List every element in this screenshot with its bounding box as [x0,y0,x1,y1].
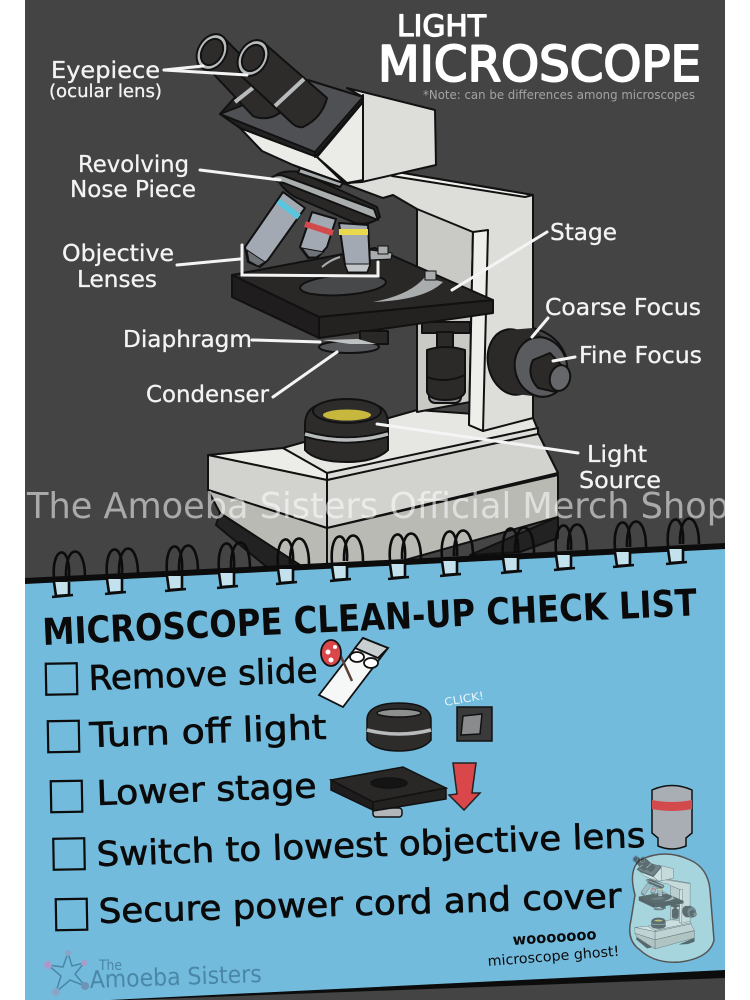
coarse and fine focus knobs [482,325,574,403]
logo: amoeba sisters [44,950,262,996]
arm and column [345,172,533,431]
part labels: Stage [550,220,617,246]
part labels: Fine Focus [579,343,702,369]
icon: light [367,703,431,751]
part labels: Light [587,442,647,468]
microscope base [208,410,558,582]
illustration: light microscope [190,29,574,582]
part labels: Nose Piece [70,177,196,203]
checklist items: Secure power cord and cover [98,876,622,932]
spiral binding [1,0,699,597]
watermark: The Amoeba Sisters Official Merch Shop [26,486,729,527]
part labels: Revolving [78,152,189,178]
icon: switch [457,707,492,741]
notebook edges [25,543,725,1000]
focus tube under stage [422,322,470,403]
icon: stage [331,767,446,817]
icon: objective lens [652,786,692,849]
part labels: Coarse Focus [545,295,701,321]
title: MICROSCOPE [378,36,701,93]
logo: amoeba sisters: The [98,958,122,974]
notebook page [25,546,725,1000]
part labels: Condenser [146,382,270,408]
microscope stage [232,246,493,338]
checklist items: Remove slide [88,651,318,699]
checklist items: Switch to lowest objective lens [96,816,646,875]
checklist boxes [46,663,87,930]
part labels [49,58,702,494]
arrow: lower [449,763,480,810]
ghost caption [487,925,620,970]
part labels: Diaphragm [123,327,252,353]
title [378,9,701,93]
part labels: Eyepiece [51,58,160,84]
condenser and diaphragm [319,331,388,353]
note: *Note: can be differences among microscopes [423,88,695,102]
part labels: Objective [62,241,174,267]
icon: microscope ghost [630,854,714,962]
light source housing [305,399,388,462]
binocular head [220,80,436,184]
title: LIGHT [397,9,486,43]
label: click: CLICK! [443,689,485,709]
revolving nose piece [272,168,380,224]
part labels: Source [579,468,661,494]
eyepiece tubes [190,29,327,127]
checklist items: Turn off light [88,708,327,756]
objective lenses [245,192,370,272]
icon: slide character with bindle [319,638,388,707]
logo: amoeba sisters: Amoeba Sisters [89,960,262,994]
ghost caption: wooooooo [512,925,597,949]
part labels: Lenses [77,267,157,293]
ghost caption: microscope ghost! [487,944,620,970]
checklist items: Lower stage [96,766,317,814]
leader lines [164,66,578,453]
checklist items [88,651,646,932]
part labels: (ocular lens) [49,81,162,102]
